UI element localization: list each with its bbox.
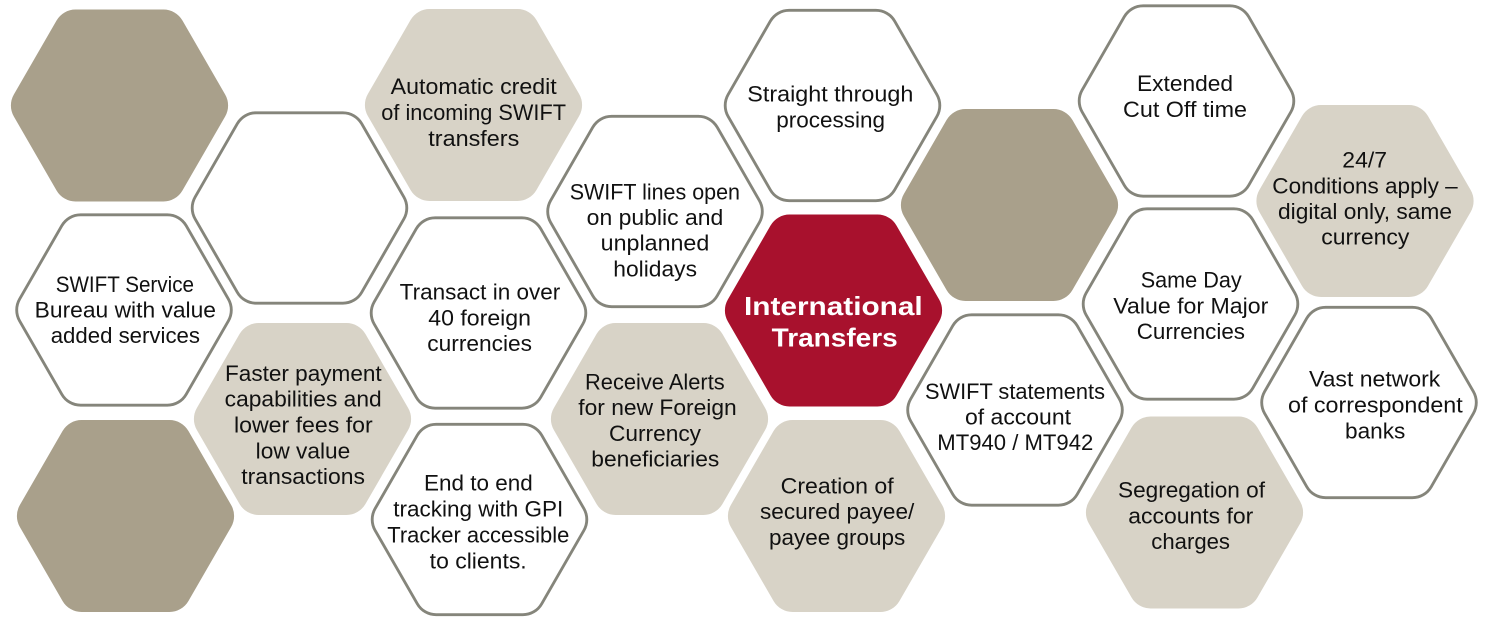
hexagon: end to end tracking: to clients.: [430, 548, 527, 573]
hexagon: end to end tracking: Tracker accessible: [387, 522, 569, 547]
hexagon: 24/7: digital only, same: [1278, 199, 1452, 224]
hexagon: receive alerts: beneficiaries: [591, 447, 719, 472]
hexagon: same day value: [1083, 209, 1298, 399]
hexagon: segregation of accounts: [1086, 416, 1303, 608]
hexagon: swift statements: MT940 / MT942: [937, 430, 1093, 455]
hexagon: transact in foreign currencies: Transact in over: [400, 280, 561, 305]
hexagon: transact in foreign currencies: [371, 218, 586, 408]
hexagon: swift lines open: holidays: [613, 256, 697, 281]
hexagon: straight through processing: processing: [776, 107, 885, 132]
hexagon: receive alerts: for new Foreign: [578, 395, 737, 420]
hexagon: dark top left: [11, 10, 228, 202]
hexagon: same day value: Currencies: [1137, 319, 1245, 344]
hexagon: vast network: of correspondent: [1288, 392, 1463, 417]
hexagon: swift service bureau: added services: [51, 323, 200, 348]
hexagon: faster payment: low value: [256, 438, 350, 463]
hexagon: vast network: banks: [1345, 418, 1405, 443]
hexagon: creation of secured payee: Creation of: [781, 473, 894, 498]
hexagon: dark upper right: [901, 109, 1118, 301]
hexagon: same day value: Same Day: [1141, 268, 1242, 293]
hexagon: creation of secured payee: secured payee/: [760, 499, 915, 524]
hexagon: 24/7: 24/7: [1342, 148, 1387, 172]
hexagon: extended cut off time: Extended: [1137, 71, 1233, 96]
hexagon: same day value: Value for Major: [1113, 293, 1269, 318]
hexagon: faster payment: transactions: [241, 464, 365, 489]
hexagon: end to end tracking: End to end: [424, 471, 533, 496]
hexagon: automatic credit: of incoming SWIFT: [381, 100, 566, 125]
hexagon: dark bottom left: [17, 420, 234, 612]
hexagon: end to end tracking: [372, 424, 587, 615]
hexagon: central title international transfers: [725, 214, 942, 406]
hexagon: swift statements: SWIFT statements: [925, 379, 1105, 404]
hexagon: central title international transfers: International: [744, 291, 923, 321]
hexagon: receive alerts: [551, 323, 768, 515]
hexagon: segregation of accounts: Segregation of: [1118, 478, 1266, 503]
hexagon: faster payment: lower fees for: [234, 412, 373, 437]
hexagon: vast network: Vast network: [1309, 367, 1441, 392]
hexagon: automatic credit: [365, 9, 582, 201]
hexagon: 24/7: [1256, 105, 1474, 297]
hexagon: creation of secured payee: [728, 420, 945, 612]
hexagon: transact in foreign currencies: 40 foreign: [428, 306, 531, 330]
hexagon: swift lines open: SWIFT lines open: [570, 179, 740, 204]
hexagon: receive alerts: Currency: [609, 421, 702, 446]
hexagon: swift service bureau: Bureau with value: [35, 298, 216, 323]
hexagon: 24/7: Conditions apply –: [1272, 173, 1458, 198]
hexagon: transact in foreign currencies: currencies: [427, 331, 532, 356]
hexagon: swift lines open: [548, 116, 762, 307]
hexagon: automatic credit: transfers: [428, 126, 519, 151]
hexagon: 24/7: currency: [1321, 224, 1410, 250]
hexagon: swift service bureau: SWIFT Service: [56, 272, 194, 297]
hexagon: swift lines open: on public and: [587, 205, 723, 230]
hexagon: swift statements: [908, 315, 1122, 505]
hexagon: faster payment: capabilities and: [225, 387, 382, 412]
hexagon: vast network: [1262, 307, 1476, 498]
hexagon: empty outline: [192, 113, 407, 303]
hexagon: straight through processing: [725, 10, 940, 201]
hexagon: automatic credit: Automatic credit: [391, 74, 557, 99]
hexagon: central title international transfers: Transfers: [772, 323, 898, 353]
hexagon: straight through processing: Straight through: [747, 82, 913, 106]
hexagon: faster payment: Faster payment: [225, 361, 382, 386]
hexagon: creation of secured payee: payee groups: [769, 525, 905, 550]
hexagon: extended cut off time: [1079, 6, 1294, 196]
hexagon: swift lines open: unplanned: [601, 231, 709, 256]
hexagon: swift service bureau: [17, 215, 231, 405]
hexagon: extended cut off time: Cut Off time: [1123, 97, 1247, 122]
hexagon: swift statements: of account: [965, 404, 1072, 430]
hexagon: segregation of accounts: charges: [1151, 529, 1230, 554]
hexagon: end to end tracking: tracking with GPI: [393, 497, 563, 522]
hexagon: receive alerts: Receive Alerts: [585, 369, 725, 394]
hexagon: segregation of accounts: accounts for: [1128, 503, 1254, 528]
hexagon: faster payment: [194, 323, 411, 515]
